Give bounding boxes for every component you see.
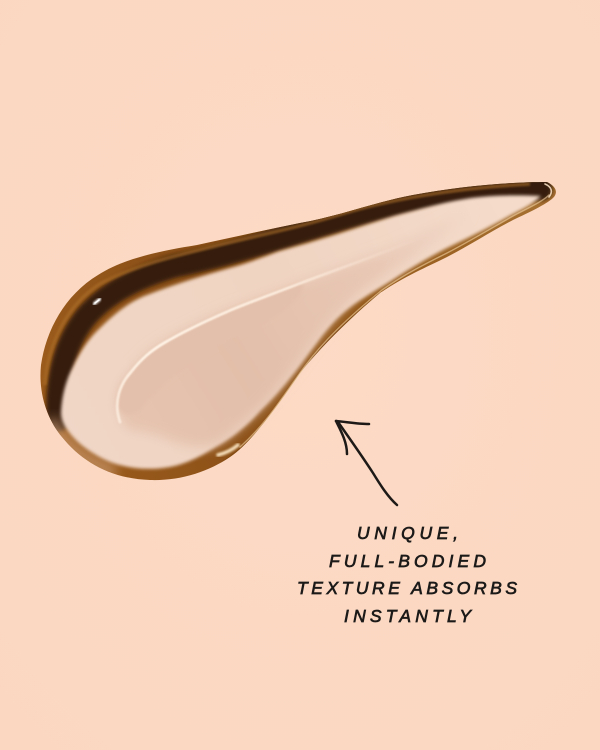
- swatch cream body: [61, 195, 541, 469]
- swatch dark shadow band: [45, 184, 541, 473]
- swatch inner swoosh: [117, 210, 470, 447]
- swoosh highlight: [117, 238, 420, 422]
- soft tan at lower-left rim: [50, 420, 115, 473]
- infographic canvas: [40, 182, 556, 622]
- caption text: [297, 523, 517, 626]
- gold glint at base: [218, 445, 238, 455]
- caption text: FULL-BODIED: [329, 551, 486, 571]
- swoosh crisp top edge: [117, 283, 303, 414]
- icon: hand-drawn arrow: [336, 421, 397, 505]
- caption text: UNIQUE,: [357, 523, 458, 543]
- tip highlight: [545, 184, 551, 197]
- rim glints: [94, 184, 551, 455]
- glass rim along tail: [240, 195, 549, 447]
- caption text: INSTANTLY: [344, 606, 472, 626]
- swatch outer rim: [40, 182, 556, 480]
- product swatch: [40, 182, 556, 480]
- white specular dot: [94, 299, 100, 304]
- caption text: TEXTURE ABSORBS: [297, 578, 517, 598]
